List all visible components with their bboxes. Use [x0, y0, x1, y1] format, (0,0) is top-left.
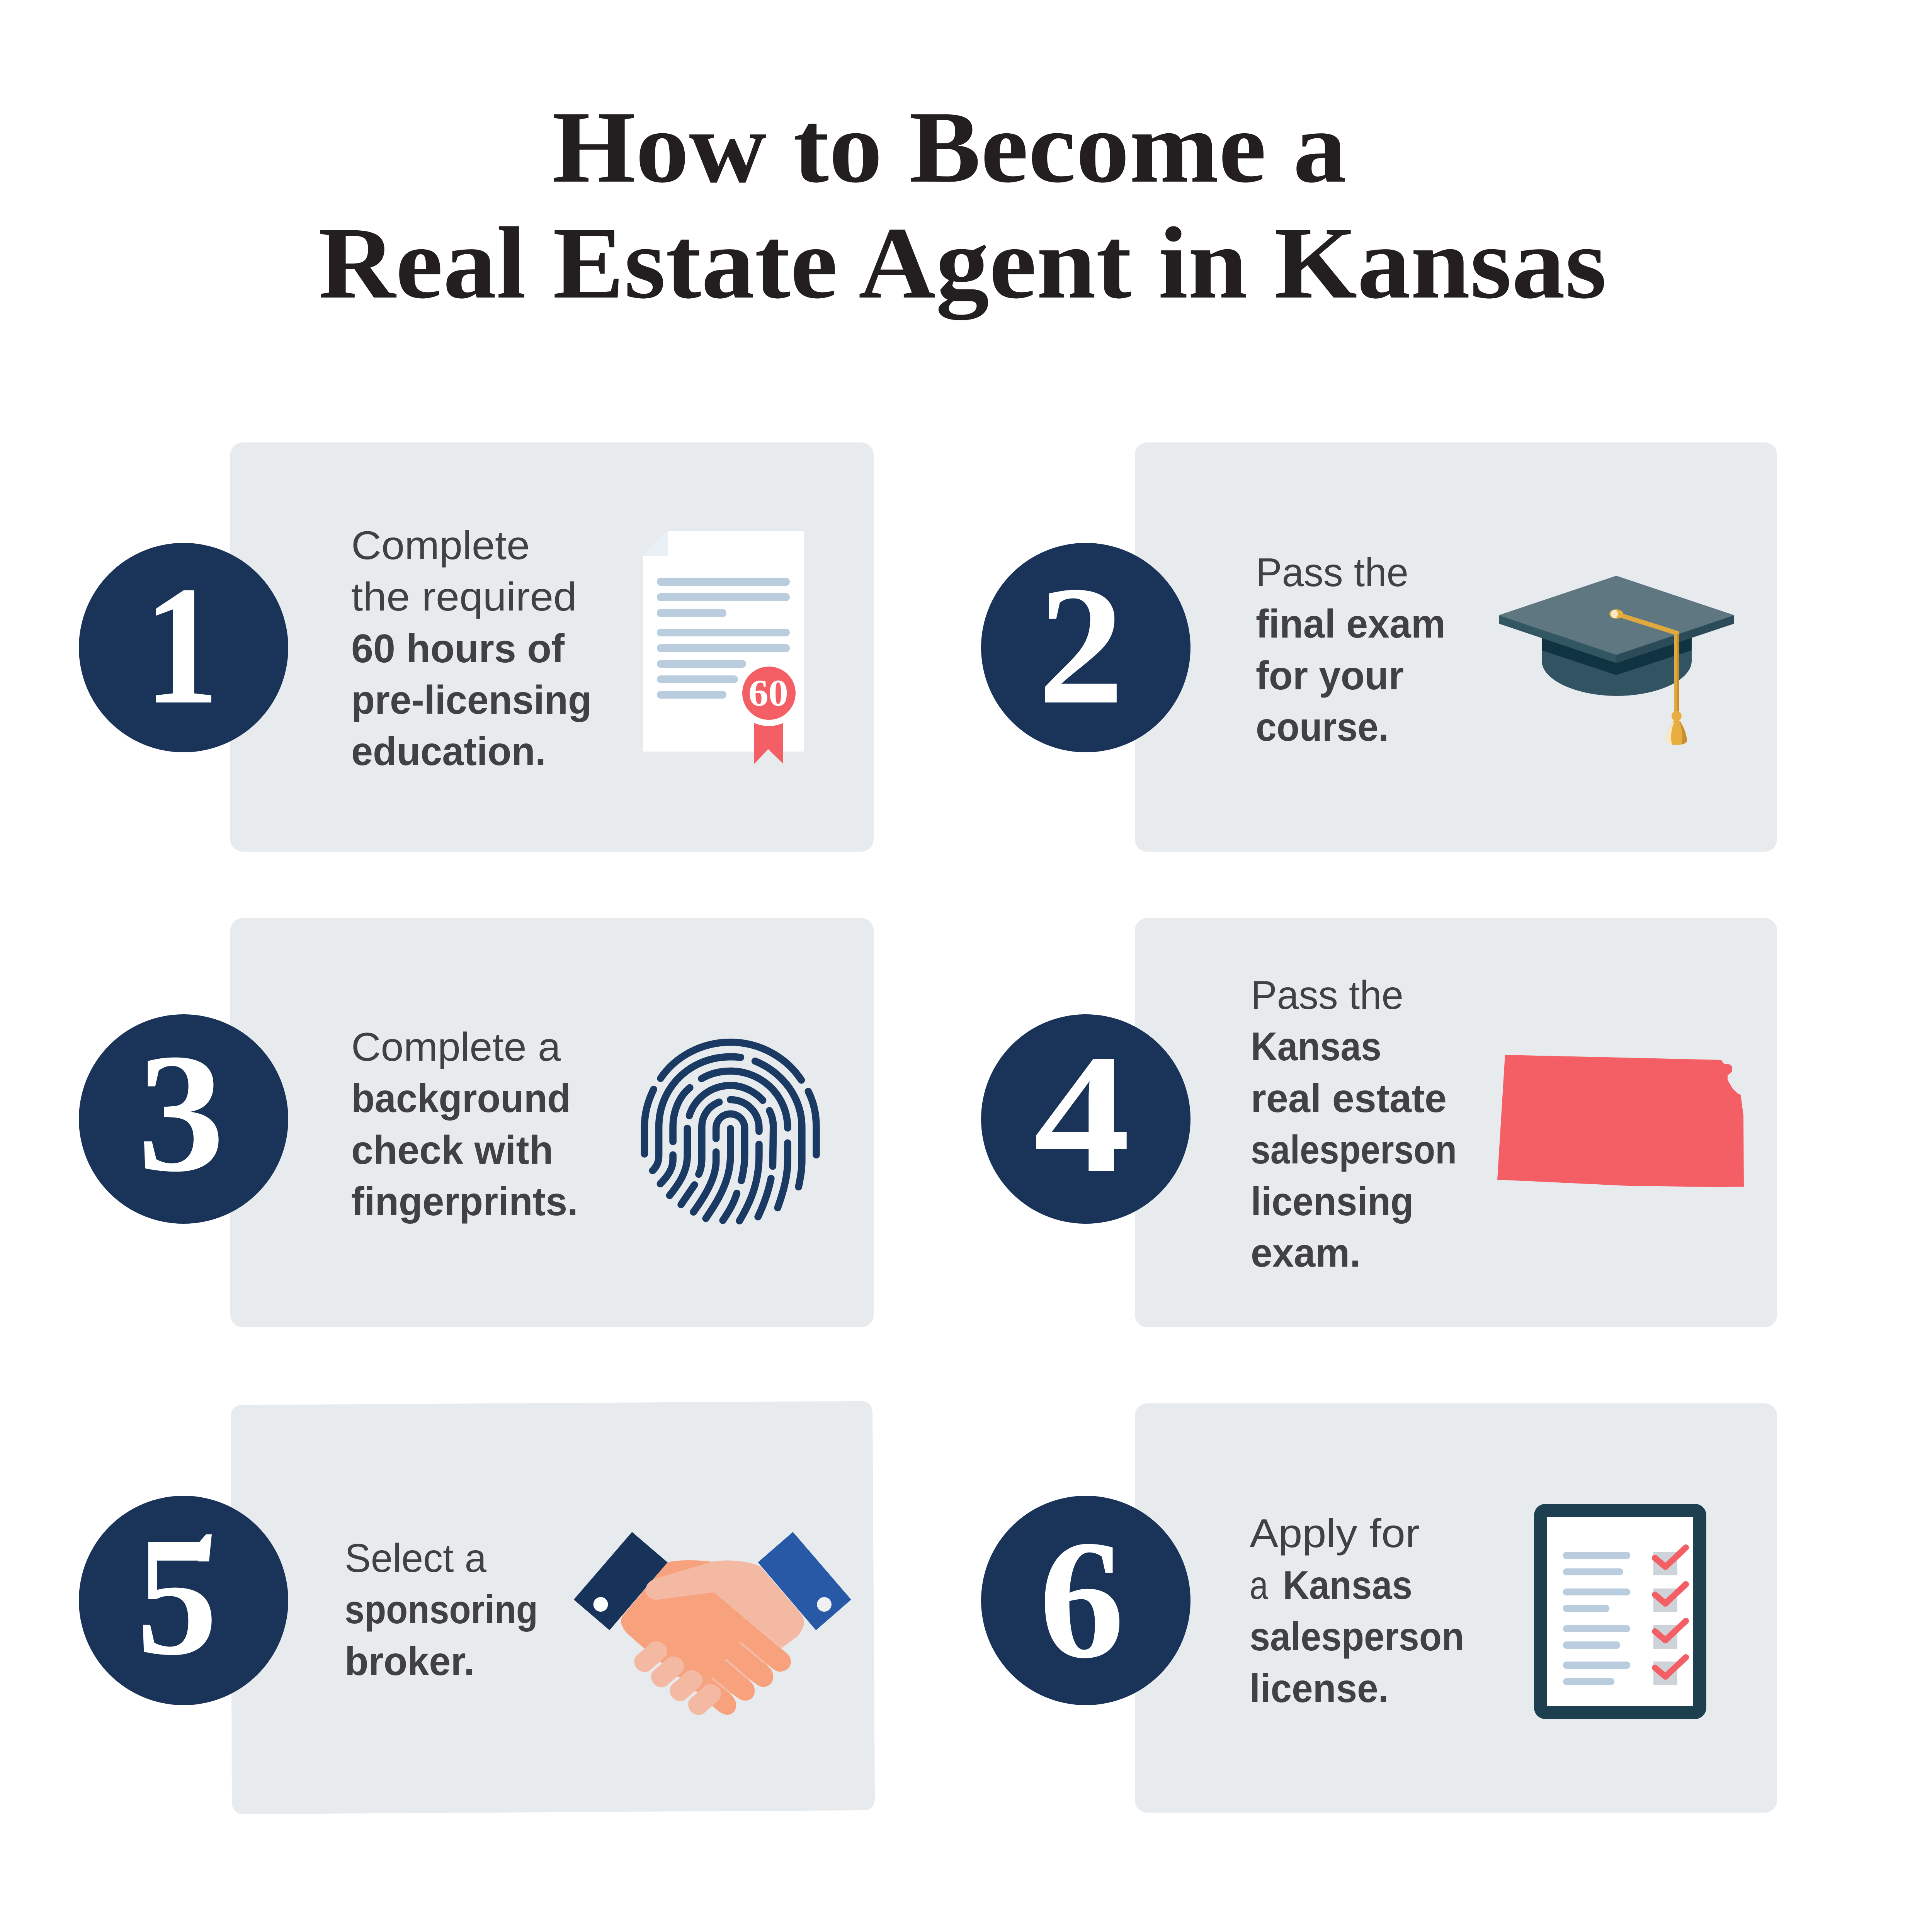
step 4 text: salesperson: [1251, 1128, 1457, 1172]
step 1 text: pre-licensing: [351, 678, 592, 723]
panel: step 2: [981, 442, 1777, 852]
number badge 2: 2: [1038, 551, 1124, 740]
step 1 text: 60 hours of: [351, 626, 565, 671]
step 6 text: Apply for: [1250, 1511, 1420, 1556]
panel: step 4: [981, 918, 1777, 1327]
card background: [1135, 1403, 1777, 1813]
step 1 text: Complete: [351, 523, 530, 568]
step 4 text: Kansas: [1251, 1024, 1381, 1069]
card background: [1135, 442, 1777, 852]
step 5 text: [345, 1536, 538, 1684]
number badge 3: [79, 1014, 288, 1224]
number badge 1: 1: [144, 551, 219, 740]
step 2 text: for your: [1256, 653, 1404, 698]
step 5 text: sponsoring: [345, 1587, 538, 1632]
step 2 text: Pass the: [1256, 550, 1408, 595]
panel: step 3: [79, 918, 874, 1327]
step 3 text: background: [351, 1076, 571, 1121]
step 1 text: [351, 523, 592, 774]
number badge 2: [981, 543, 1190, 752]
step 3 text: [351, 1025, 578, 1224]
icon: handshake: [574, 1532, 851, 1715]
card background: [231, 1401, 875, 1814]
icon: fingerprint: [645, 1042, 816, 1221]
step 3 text: Complete a: [351, 1025, 561, 1070]
step 5 text: Select a: [345, 1536, 486, 1581]
step 6 text: Kansas: [1283, 1563, 1412, 1608]
step 6 text: [1250, 1511, 1464, 1711]
step 6 text: license.: [1250, 1666, 1389, 1711]
step 3 text: check with: [351, 1128, 553, 1173]
icon: certificate: 60: [748, 672, 788, 714]
number badge 6: 6: [1039, 1505, 1124, 1694]
number badge 4: 4: [1034, 1020, 1130, 1208]
step 6 text: a: [1250, 1563, 1268, 1608]
step 2 text: final exam: [1256, 602, 1446, 646]
icon: Kansas state map: [1497, 1055, 1744, 1187]
number badge 5: 5: [136, 1502, 218, 1690]
card background: [1135, 918, 1777, 1327]
step 4 text: licensing: [1251, 1179, 1413, 1224]
card background: [230, 442, 874, 852]
number badge 6: [981, 1496, 1190, 1705]
step 5 text: broker.: [345, 1639, 474, 1684]
step 6 text: salesperson: [1250, 1614, 1464, 1659]
step 3 text: fingerprints.: [351, 1179, 578, 1224]
card background: [230, 918, 874, 1327]
step 4 text: real estate: [1251, 1076, 1447, 1121]
panel: step 5: [79, 1401, 875, 1814]
step 2 text: course.: [1256, 705, 1389, 750]
title: [318, 90, 1607, 321]
step 4 text: exam.: [1251, 1231, 1361, 1276]
icon: checklist: [1534, 1504, 1706, 1719]
icon: certificate: [643, 531, 804, 764]
title: How to Become a: [552, 90, 1347, 204]
number badge 3: 3: [138, 1019, 224, 1207]
number badge 4: [981, 1014, 1190, 1224]
icon: graduation cap: [1499, 576, 1734, 745]
step 1 text: the required: [351, 575, 577, 619]
number badge 1: [79, 543, 288, 752]
step 2 text: [1256, 550, 1446, 750]
title: Real Estate Agent in Kansas: [318, 206, 1607, 321]
step 1 text: education.: [351, 729, 546, 774]
panel: step 6: [981, 1403, 1777, 1813]
step 4 text: [1251, 973, 1457, 1276]
panel: step 1: [79, 442, 874, 852]
step 4 text: Pass the: [1251, 973, 1403, 1018]
number badge 5: [79, 1496, 288, 1705]
